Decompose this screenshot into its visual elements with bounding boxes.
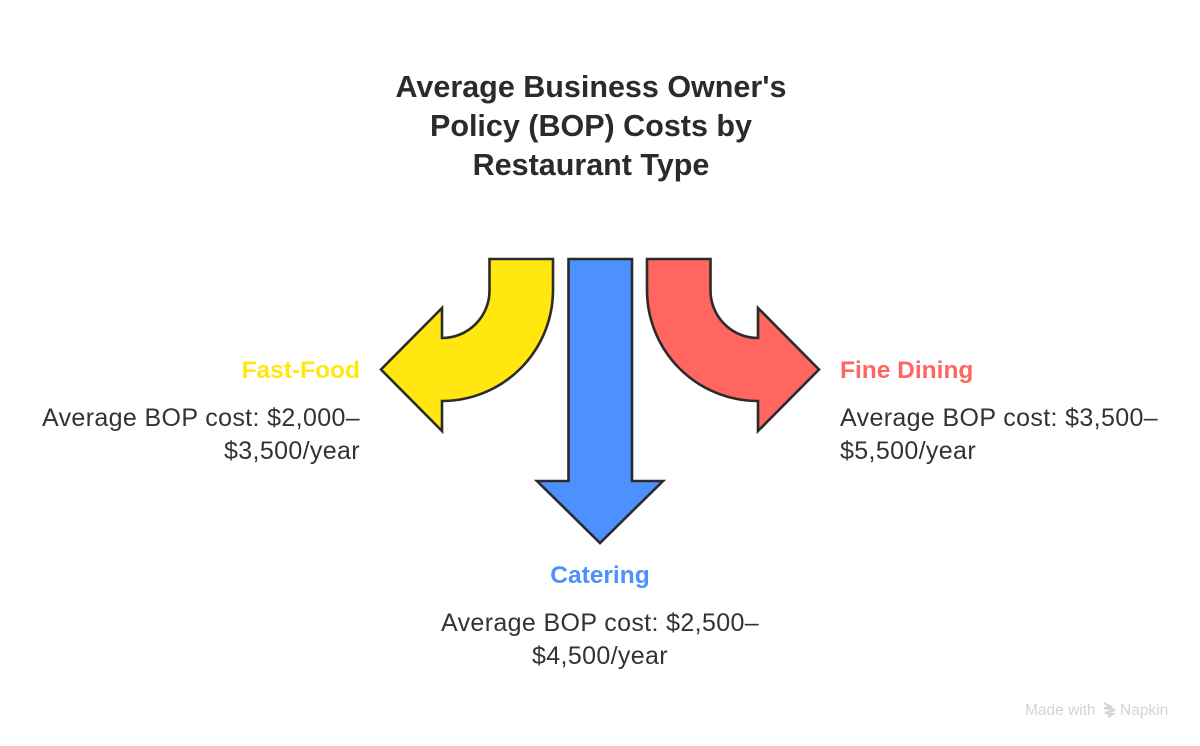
- arrow: yellow curved left (Fast-Food): [381, 259, 553, 431]
- text: Fine Dining cost: $5,500/year: [840, 437, 976, 465]
- title: Restaurant Type: [473, 148, 709, 182]
- text: Catering cost: $4,500/year: [532, 642, 668, 670]
- watermark: Made with Napkin: Made with: [1025, 702, 1096, 719]
- text: Fine Dining cost: [840, 404, 1158, 465]
- title: [396, 70, 786, 182]
- watermark: Made with Napkin: [1025, 702, 1168, 719]
- text: Catering cost: [441, 609, 759, 670]
- label: Fast-Food heading: Fast-Food: [242, 357, 360, 384]
- arrow: blue straight down (Catering): [537, 259, 663, 543]
- text: Fast-Food cost: [42, 404, 360, 465]
- label: Catering heading: Catering: [550, 562, 650, 589]
- title: Policy (BOP) Costs by: [430, 109, 752, 143]
- text: Fast-Food cost: Average BOP cost: $2,000–: [42, 404, 360, 432]
- arrow: red curved right (Fine Dining): [647, 259, 819, 431]
- text: Fine Dining cost: Average BOP cost: $3,500–: [840, 404, 1158, 432]
- text: Fast-Food cost: $3,500/year: [224, 437, 360, 465]
- watermark: Made with Napkin: Napkin: [1120, 702, 1168, 719]
- text: Catering cost: Average BOP cost: $2,500–: [441, 609, 759, 637]
- label: Fine Dining heading: Fine Dining: [840, 357, 973, 384]
- title: Average Business Owner's: [396, 70, 786, 104]
- icon: Napkin logo: [1104, 702, 1116, 718]
